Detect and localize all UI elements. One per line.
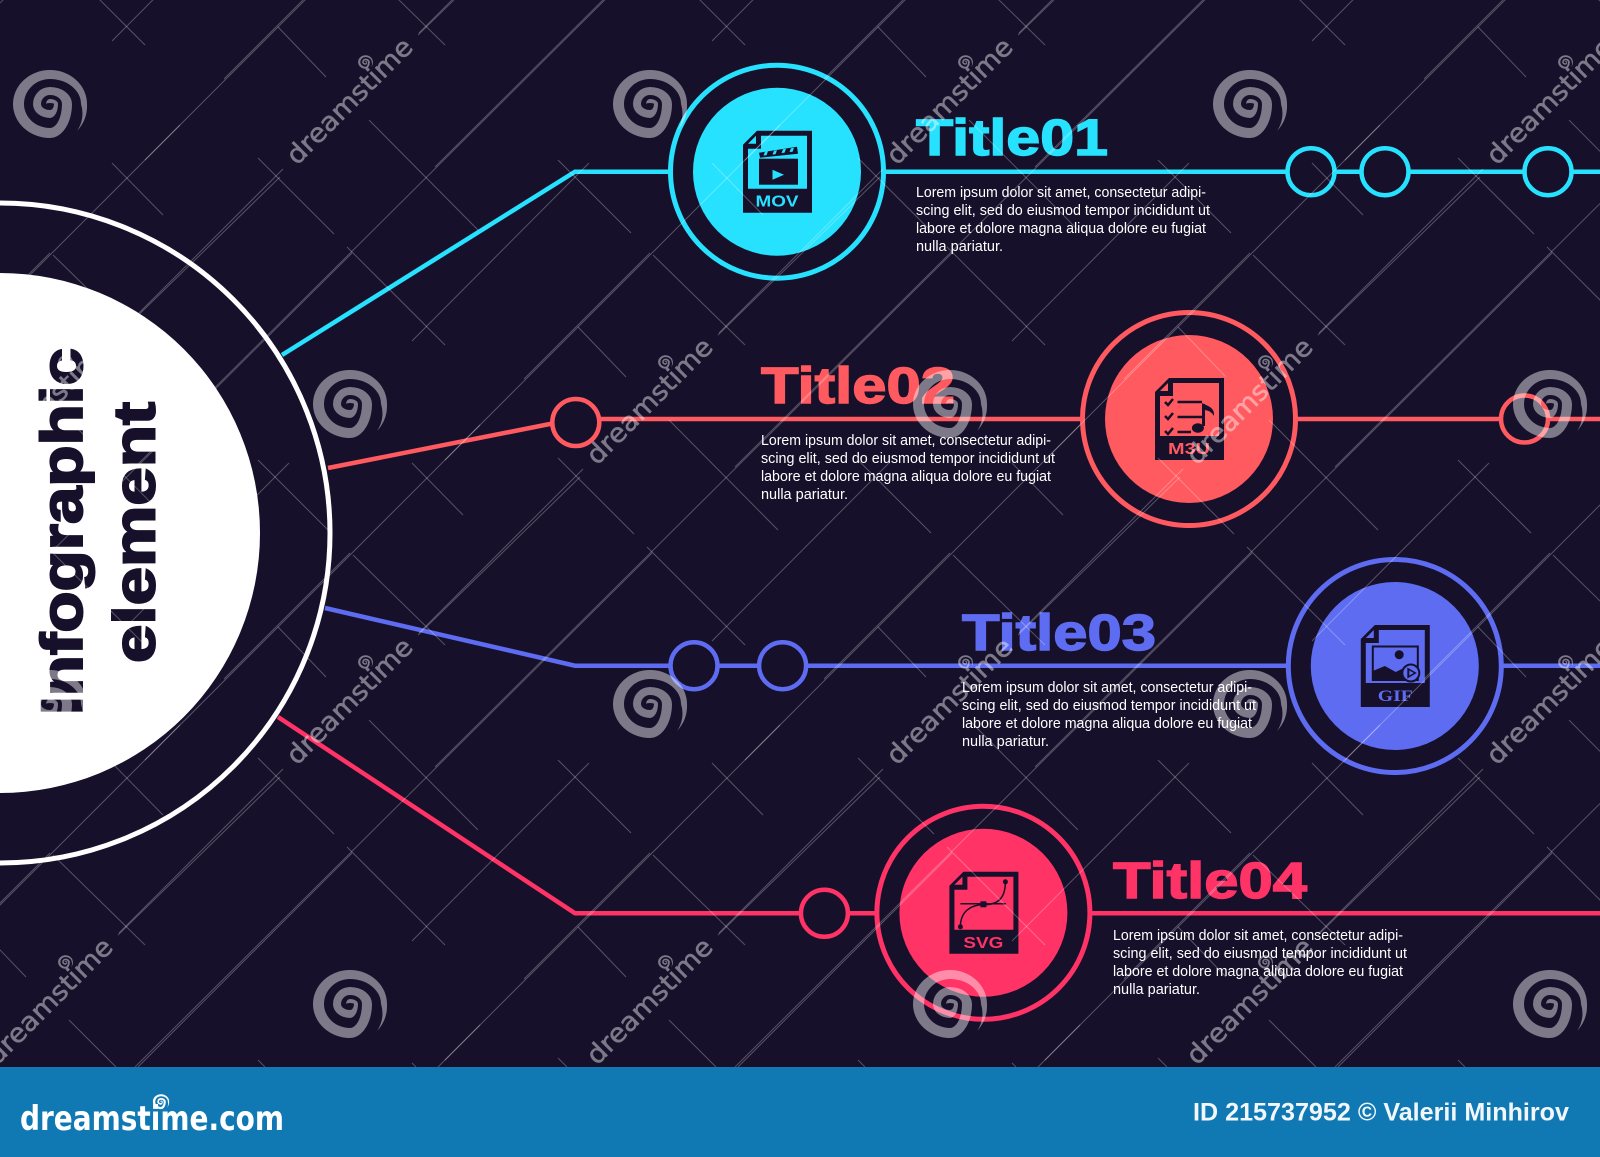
text block 02: scing elit, sed do eiusmod tempor incididunt ut xyxy=(761,451,1055,467)
panel: item 03 GIF xyxy=(1288,560,1501,772)
title 03: Title03 xyxy=(962,604,1156,661)
icon: GIF file xyxy=(1361,625,1430,707)
title 04: Title04 xyxy=(1113,852,1308,909)
text block 03: Lorem ipsum dolor sit amet, consectetur adipi- xyxy=(962,680,1252,696)
watermark layer: dreamstime xyxy=(281,632,419,771)
text block 02: labore et dolore magna aliqua dolore eu fugiat xyxy=(761,469,1051,485)
connector line 2 with nodes xyxy=(328,396,1600,468)
text block 01: labore et dolore magna aliqua dolore eu fugiat xyxy=(916,221,1206,237)
text block 01: Lorem ipsum dolor sit amet, consectetur adipi- xyxy=(916,185,1206,201)
footer credit: ID 215737952 © Valerii Minhirov xyxy=(1193,1099,1569,1127)
footer bar xyxy=(0,1067,1600,1157)
watermark layer: dreamstime xyxy=(281,32,419,171)
text block 02: Lorem ipsum dolor sit amet, consectetur adipi- xyxy=(761,433,1051,449)
text block 02: nulla pariatur. xyxy=(761,487,848,503)
footer logo: dreamstime.com xyxy=(20,1099,284,1139)
watermark layer: dreamstime xyxy=(881,632,1019,771)
text block 01: scing elit, sed do eiusmod tempor incididunt ut xyxy=(916,203,1210,219)
panel: item 04 SVG xyxy=(877,806,1090,1019)
icon: MOV file: MOV xyxy=(755,194,799,211)
text block 04 xyxy=(1113,928,1407,998)
text block 04: scing elit, sed do eiusmod tempor incididunt ut xyxy=(1113,946,1407,962)
text block 03: labore et dolore magna aliqua dolore eu fugiat xyxy=(962,716,1252,732)
text block 04: nulla pariatur. xyxy=(1113,982,1200,998)
icon: MOV file xyxy=(743,131,812,213)
text block 04: labore et dolore magna aliqua dolore eu fugiat xyxy=(1113,964,1403,980)
heading: Infographic element: element xyxy=(102,402,168,663)
icon: GIF file: GIF xyxy=(1378,688,1413,705)
title 01: Title01 xyxy=(916,109,1108,166)
connector line 4 with node xyxy=(278,717,1600,937)
connector line 3 with nodes xyxy=(325,608,1600,689)
watermark layer: dreamstime xyxy=(581,932,719,1071)
title 02: Title02 xyxy=(761,357,955,414)
text block 02 xyxy=(761,433,1055,503)
heading: Infographic element: Infographic xyxy=(30,348,95,715)
panel: item 02 M3U xyxy=(1082,312,1296,526)
watermark layer: dreamstime xyxy=(881,32,1019,171)
text block 03: scing elit, sed do eiusmod tempor incididunt ut xyxy=(962,698,1256,714)
heading: Infographic element xyxy=(30,348,168,715)
text block 01 xyxy=(916,185,1210,255)
text block 03 xyxy=(962,680,1256,750)
icon: SVG file: SVG xyxy=(963,935,1003,952)
text block 04: Lorem ipsum dolor sit amet, consectetur adipi- xyxy=(1113,928,1403,944)
icon: SVG file xyxy=(949,872,1018,954)
central hub circle xyxy=(0,203,330,863)
icon: M3U file: M3U xyxy=(1168,441,1210,458)
watermark layer: dreamstime xyxy=(1181,332,1319,471)
text block 03: nulla pariatur. xyxy=(962,734,1049,750)
connector line 1 with nodes xyxy=(282,148,1600,355)
panel: item 01 MOV xyxy=(670,65,884,278)
text block 01: nulla pariatur. xyxy=(916,239,1003,255)
watermark layer: dreamstime xyxy=(581,332,719,471)
watermark layer: dreamstime xyxy=(1181,932,1319,1071)
icon: M3U file xyxy=(1155,378,1224,460)
